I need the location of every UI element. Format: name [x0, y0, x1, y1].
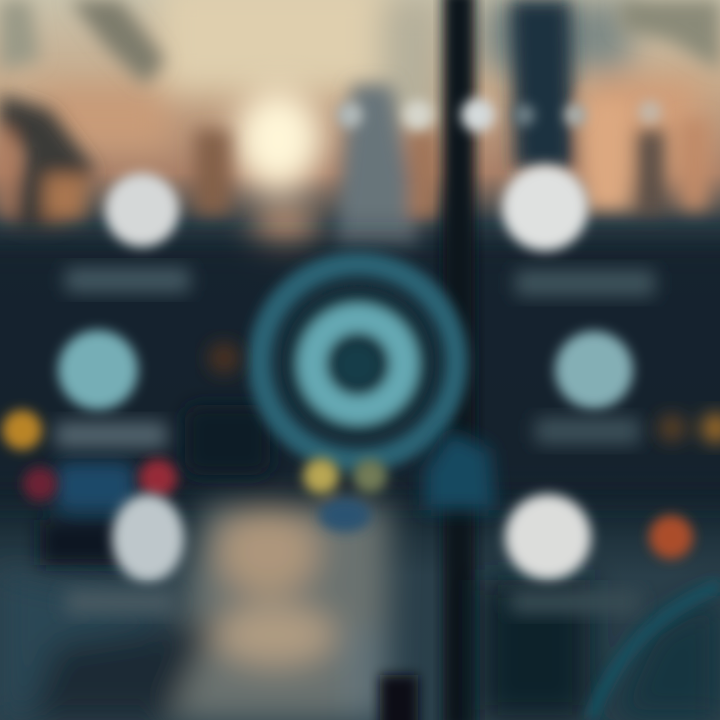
label: bottom left text: [65, 590, 175, 614]
sun glow: [234, 90, 322, 250]
icon: amber dots: [658, 413, 720, 443]
palm silhouettes: [0, 0, 720, 230]
panel: top left node: [65, 173, 190, 292]
icon: bottom right circle: [505, 494, 591, 580]
icon: orange dot: [649, 515, 693, 559]
icon: car tail lights: [23, 459, 177, 501]
central target icon: [260, 264, 456, 460]
icon: amber dot: [2, 410, 42, 450]
sunset sky: [40, 0, 700, 180]
icon: dim orange blob centre left: [208, 342, 240, 374]
central tower: [335, 85, 438, 250]
road: [0, 505, 390, 720]
small coloured icons below target: [303, 458, 387, 532]
icon: middle left circle: [58, 330, 138, 410]
icon: bottom left circle: [112, 494, 184, 582]
panel: bottom right node: [505, 494, 693, 614]
icon: top right circle: [502, 165, 588, 251]
label: top left text: [65, 268, 190, 292]
panel: bottom left node: [65, 494, 184, 614]
icon: top left circle: [105, 173, 179, 247]
panel: middle right node: [535, 331, 720, 444]
top row dots: [337, 98, 662, 132]
label: middle left text: [55, 422, 167, 448]
dark band under skyline: [0, 240, 720, 500]
label: bottom right text: [510, 590, 640, 614]
panel: middle left node: [2, 330, 167, 450]
car: [40, 405, 270, 565]
curved teal line: [590, 585, 720, 720]
icon: middle right circle: [555, 331, 633, 409]
panel: top right node: [502, 165, 655, 296]
right dark column: [480, 580, 720, 720]
label: middle right text: [535, 418, 640, 444]
label: top right text: [515, 270, 655, 296]
figure at bottom: [380, 675, 418, 720]
vertical pole: [443, 0, 475, 720]
teal glow under target: [425, 430, 495, 510]
